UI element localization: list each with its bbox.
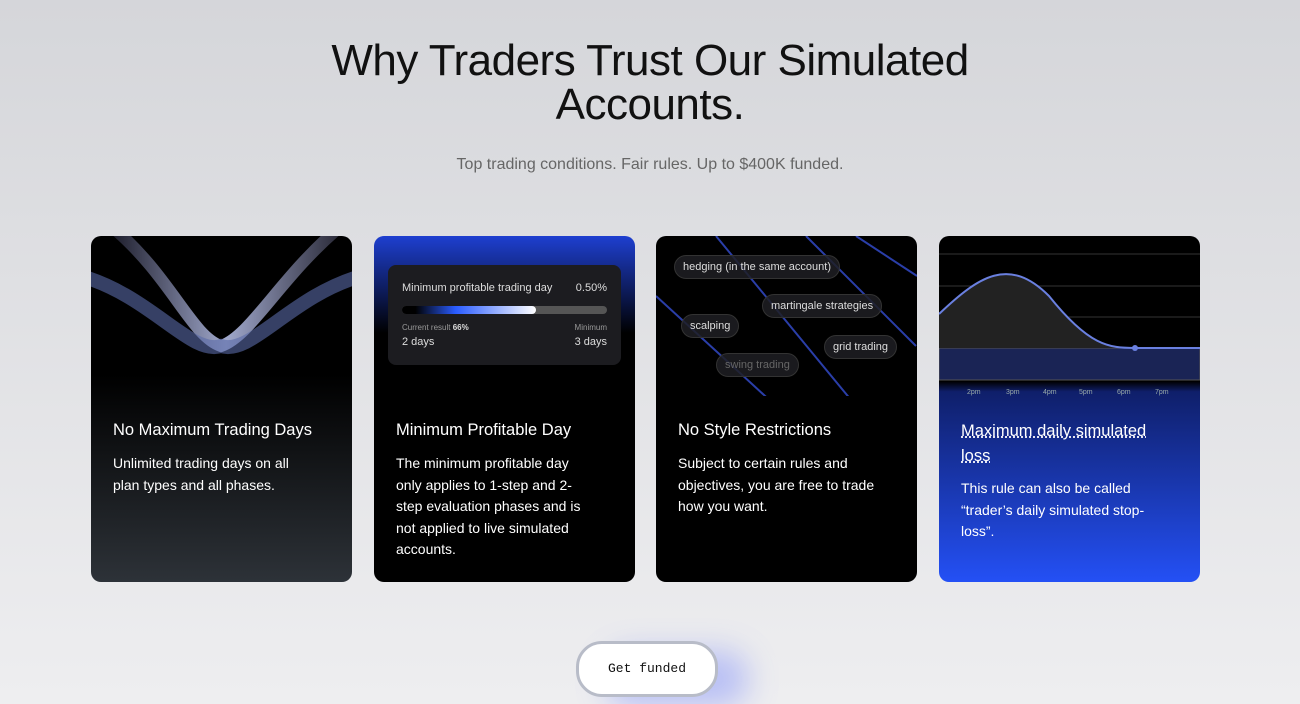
- text: [961, 478, 1166, 542]
- progress widget: Current result 66%: [402, 323, 469, 332]
- text: how you want.: [678, 498, 768, 514]
- text: Unlimited trading days on all: [113, 455, 289, 471]
- progress widget: 0.50%: [576, 282, 607, 294]
- subtitle: Top trading conditions. Fair rules. Up to $400K funded.: [457, 156, 843, 173]
- heading: [961, 419, 1181, 469]
- chart: 2pm: [967, 389, 981, 396]
- text: not applied to live simulated: [396, 520, 569, 536]
- progress widget: [388, 265, 621, 365]
- style tags: hedging (in the same account): [683, 261, 831, 273]
- text: step evaluation phases and is: [396, 498, 580, 514]
- progress widget: 2 days: [402, 336, 434, 348]
- heading: No Style Restrictions: [678, 421, 831, 439]
- chart: 5pm: [1079, 389, 1093, 396]
- text: loss”.: [961, 523, 994, 539]
- progress widget: Minimum: [575, 323, 607, 332]
- card 1: [91, 236, 352, 582]
- style tags: swing trading: [725, 359, 790, 371]
- heading: No Maximum Trading Days: [113, 421, 312, 439]
- text: The minimum profitable day: [396, 455, 569, 471]
- button: get funded: Get funded: [608, 661, 686, 676]
- icon: infinity ribbon: [91, 236, 352, 396]
- card 4: [939, 236, 1200, 582]
- progress widget: 3 days: [575, 336, 607, 348]
- text: [678, 453, 883, 518]
- chart: 6pm: [1117, 389, 1131, 396]
- text: “trader’s daily simulated stop-: [961, 502, 1144, 518]
- progress widget: Minimum profitable trading day: [402, 282, 552, 294]
- text: This rule can also be called: [961, 480, 1131, 496]
- text: objectives, you are free to trade: [678, 476, 874, 492]
- card 3: [656, 236, 917, 582]
- text: [396, 453, 601, 560]
- style tags: scalping: [690, 320, 730, 332]
- text: accounts.: [396, 541, 456, 557]
- heading: Maximum daily simulated: [961, 422, 1146, 440]
- chart: [939, 236, 1200, 396]
- text: plan types and all phases.: [113, 476, 275, 492]
- style tags: grid trading: [833, 341, 888, 353]
- style tags: martingale strategies: [771, 300, 873, 312]
- card 2: [374, 236, 635, 582]
- chart: 7pm: [1155, 389, 1169, 396]
- style tags: [656, 236, 917, 396]
- text: Subject to certain rules and: [678, 455, 848, 471]
- heading: Minimum Profitable Day: [396, 421, 571, 439]
- chart: 3pm: [1006, 389, 1020, 396]
- text: only applies to 1-step and 2-: [396, 476, 572, 492]
- text: [113, 453, 318, 496]
- heading: loss: [961, 447, 990, 465]
- title: Why Traders Trust Our Simulated Accounts.: [331, 36, 969, 129]
- chart: 4pm: [1043, 389, 1057, 396]
- button: get funded: [576, 641, 718, 697]
